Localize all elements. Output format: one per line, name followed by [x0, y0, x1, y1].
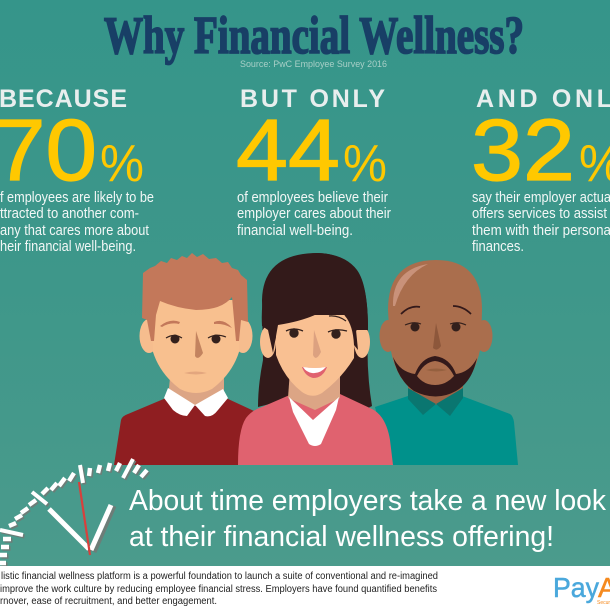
shirt — [375, 396, 518, 465]
panel: but only 44% — [236, 85, 391, 239]
headline text — [129, 485, 606, 553]
pink top — [238, 394, 393, 465]
neck — [408, 380, 463, 405]
back hair — [258, 253, 372, 420]
body text: ttracted to another com- — [0, 206, 139, 222]
headline text: at their financial wellness offering! — [129, 521, 554, 553]
stat: percent sign: % — [343, 135, 387, 193]
sweater — [114, 398, 254, 465]
nose — [433, 323, 441, 350]
head highlight — [393, 264, 428, 306]
panel: because 70% — [0, 85, 154, 255]
body text — [0, 190, 154, 255]
minute and hour hands — [49, 505, 111, 550]
stat: percent sign: % — [100, 135, 144, 193]
heading: because: BECAUSE — [0, 85, 127, 113]
body text: f employees are likely to be — [0, 190, 154, 206]
clock ticks shadow — [2, 460, 148, 564]
stat: 32: 32 — [471, 102, 575, 199]
footer text: improve the work culture by reducing employee financial stress. Employers have found quantified benefits — [0, 584, 437, 595]
source line: Source: PwC Employee Survey 2016 — [240, 59, 387, 70]
body text — [237, 190, 391, 239]
body text: financial well-being. — [237, 223, 353, 239]
chin skin patch — [417, 361, 454, 385]
headline text: About time employers take a new look — [129, 485, 606, 517]
eyes — [170, 334, 180, 344]
footer text: rnover, ease of recruitment, and better engagement. — [0, 596, 217, 607]
mouth — [426, 368, 447, 372]
mouth — [184, 372, 207, 374]
heading: but only: BUT ONLY — [240, 85, 385, 113]
minute and hour hands shadow — [51, 506, 114, 552]
illustration: man with red hair — [114, 253, 254, 465]
eyebrows — [160, 321, 232, 328]
ears — [260, 326, 276, 358]
stat: 44: 44 — [236, 102, 340, 199]
footer panel — [0, 566, 610, 610]
body text: of employees believe their — [237, 190, 388, 206]
illustration: bald man with beard — [375, 260, 518, 465]
nose — [313, 330, 321, 358]
neck — [168, 378, 224, 406]
logo: Pay — [553, 572, 599, 603]
mouth — [302, 367, 327, 378]
heading: and only: AND ONL — [476, 85, 610, 113]
clock ticks — [0, 459, 147, 563]
face — [152, 300, 240, 393]
hair — [142, 253, 248, 341]
nose — [195, 331, 203, 358]
eyebrows — [401, 306, 471, 314]
body text: employer cares about their — [237, 206, 391, 222]
body text: any that cares more about — [0, 223, 149, 239]
collar — [164, 388, 228, 416]
head — [388, 260, 482, 396]
beard — [393, 356, 477, 396]
illustration: woman with dark hair — [238, 253, 393, 465]
panel: and only 32% — [471, 85, 610, 255]
footer text: listic financial wellness platform is a powerful foundation to launch a suite of conventional and re-imagined — [1, 571, 438, 582]
ears — [380, 320, 396, 352]
footer text — [0, 571, 438, 607]
body text — [472, 190, 610, 255]
body text: finances. — [472, 239, 524, 255]
neck — [288, 370, 340, 410]
logo: Secur — [597, 600, 610, 606]
eyes — [289, 328, 299, 338]
collar — [408, 388, 463, 416]
eyes — [410, 322, 420, 332]
fringe — [262, 253, 368, 353]
ears — [140, 319, 158, 353]
body text: heir financial well-being. — [0, 239, 136, 255]
second hand — [79, 482, 90, 555]
icon: clock — [0, 459, 148, 564]
face — [276, 315, 355, 396]
white blouse — [289, 397, 339, 446]
